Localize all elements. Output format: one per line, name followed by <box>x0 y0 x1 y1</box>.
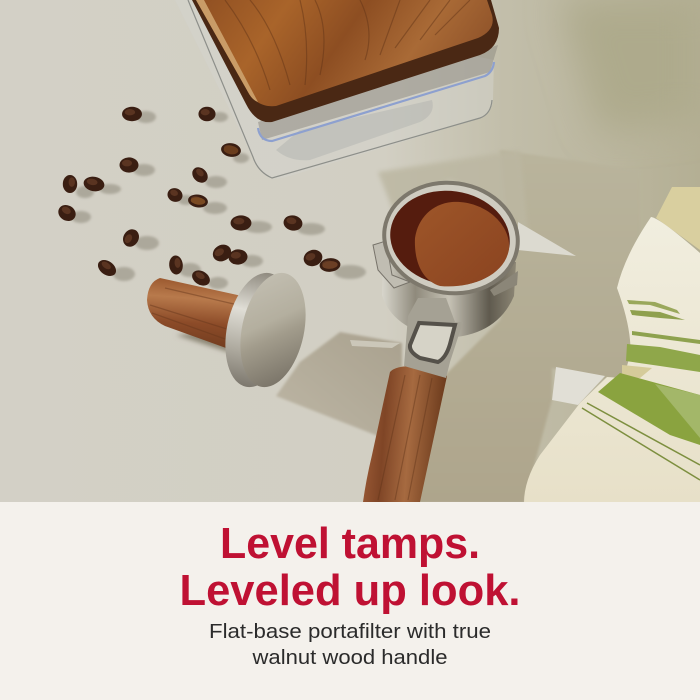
walnut lid <box>192 0 499 122</box>
walnut handle <box>363 366 447 502</box>
coffee beans <box>55 107 366 289</box>
tamper walnut handle <box>147 278 242 348</box>
subheading <box>209 620 491 669</box>
caption panel <box>0 502 700 700</box>
clear container <box>175 0 494 179</box>
counter surface <box>0 0 700 503</box>
rim <box>375 172 527 304</box>
steel bracket <box>404 298 463 378</box>
portafilter <box>363 172 527 502</box>
subheading: Flat-base portafilter with true <box>209 620 491 643</box>
shadow: portafilter cast shadow on counter <box>276 150 640 503</box>
steel basket body <box>382 262 516 338</box>
lugs <box>373 241 410 288</box>
storage box <box>175 0 499 179</box>
heading <box>180 519 520 615</box>
coffee puck <box>415 202 509 286</box>
tamper <box>147 267 315 393</box>
heading: Leveled up look. <box>180 566 520 615</box>
photo: counter scene <box>0 0 700 503</box>
towel <box>524 187 700 503</box>
subheading: walnut wood handle <box>251 646 448 669</box>
tamper steel base <box>216 267 300 393</box>
heading: Level tamps. <box>220 519 480 568</box>
